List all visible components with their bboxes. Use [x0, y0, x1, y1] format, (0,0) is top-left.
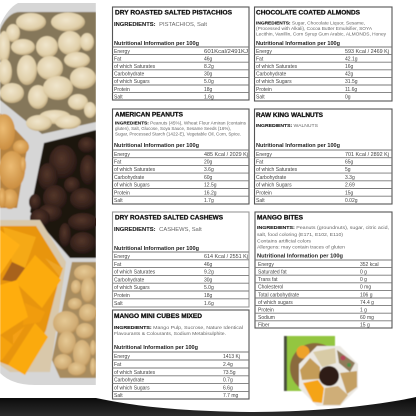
nutrition table: Carbohydrate — [114, 277, 145, 283]
nutrition table: Fiber — [258, 323, 270, 329]
nutrition table: 701 Kcal / 2892 Kj — [345, 152, 389, 158]
ingredients: INGREDIENTS: Peanuts (groundnuts), sugar, citric acid, — [257, 225, 389, 230]
nutrition table — [112, 252, 249, 307]
nutrition table: Energy — [114, 254, 130, 260]
nutrition table: Fat — [114, 262, 122, 268]
nutrition table: of which sugars — [258, 300, 293, 306]
chocolate almond compartment — [29, 130, 98, 258]
ingredients: Contains artificial colors — [257, 238, 312, 244]
nutrition table: of which Sugars — [114, 183, 150, 189]
nutrition table: Protein — [114, 87, 130, 93]
nutrition table: 46g — [204, 262, 213, 268]
ingredients: INGREDIENTS: PISTACHIOS, Salt — [114, 22, 207, 28]
nutrition table: 352 kcal — [360, 262, 379, 268]
nutrition table: 42g — [345, 72, 354, 78]
nutrition table — [254, 47, 392, 100]
nutrition table: Salt — [114, 393, 123, 399]
nutrition table: Salt — [114, 301, 123, 307]
nutrition table: 3.6g — [204, 167, 214, 173]
nutrition table: 42.1g — [345, 56, 358, 62]
nutrition heading: Nutritional Information per 100g — [114, 246, 200, 252]
nutrition table: 593 Kcal / 2469 Kj — [345, 49, 389, 55]
nutrition table: 1 g — [360, 308, 367, 314]
nutrition table: Salt — [114, 198, 123, 204]
nutrition table: 20g — [204, 160, 213, 166]
nutrition table: of which Sugars — [114, 385, 150, 391]
nutrition table: Fat — [114, 362, 122, 368]
ingredients — [257, 225, 389, 250]
nutrition table — [255, 260, 392, 329]
nutrition table: 18g — [204, 293, 213, 299]
nutrition table: Energy — [114, 49, 130, 55]
ingredients: Lecithin, Vanillin, Corn Syrup Gum Arabic, ALMONDS, Honey — [256, 32, 387, 36]
nutrition table: of which Saturates — [114, 370, 156, 376]
nutrition table: Energy — [256, 152, 272, 158]
nutrition table: 16g — [345, 64, 354, 70]
nutrition table: Energy — [114, 152, 130, 158]
ingredients: INGREDIENTS: WALNUTS — [256, 123, 318, 128]
ingredients: INGREDIENTS: CASHEWS, Salt — [114, 227, 202, 233]
nutrition table: 18g — [204, 87, 213, 93]
nutrition table: 46g — [204, 56, 213, 62]
panel: dry roasted salted cashews — [112, 212, 249, 307]
nutrition table: 1.6g — [204, 94, 214, 100]
product image: gift box and octagonal tray — [284, 336, 358, 406]
mango compartment — [0, 220, 66, 375]
photo: snack tray close-up — [0, 0, 98, 400]
heading: MANGO MINI CUBES MIXED — [114, 314, 203, 320]
nutrition table: 1.6g — [204, 301, 214, 307]
nutrition table — [112, 47, 249, 100]
heading: DRY ROASTED SALTED PISTACHIOS — [115, 10, 232, 16]
heading: CHOCOLATE COATED ALMONDS — [256, 10, 360, 16]
nutrition table: of which Sugars — [114, 285, 150, 291]
ingredients — [115, 120, 247, 136]
nutrition table: of which Sugars — [256, 79, 292, 85]
nutrition table: Carbohydrate — [256, 175, 287, 181]
ingredients: Allergens: may contain traces of gluten — [257, 244, 346, 250]
nutrition table: 3.3g — [345, 175, 355, 181]
nutrition table: Fat — [114, 56, 122, 62]
peanut compartment — [52, 262, 97, 378]
nutrition table: of which Sugars — [256, 183, 292, 189]
heading: DRY ROASTED SALTED CASHEWS — [115, 216, 223, 222]
nutrition table: 0 g — [360, 270, 367, 276]
nutrition table: Fat — [256, 56, 264, 62]
nutrition table: 60 mg — [360, 315, 374, 321]
nutrition table: Protein — [256, 87, 272, 93]
nutrition heading: Nutritional Information per 100g — [114, 143, 200, 149]
ingredients: Sugar, Processed Starch (1422-E), Vegetable Oil, Corn, Spice. — [115, 132, 241, 136]
nutrition heading: Nutritional Information per 100g — [114, 41, 200, 47]
nutrition table: 11.6g — [345, 87, 357, 93]
nutrition table: of which Saturates — [114, 167, 156, 173]
nutrition table: Fat — [256, 160, 264, 166]
nutrition heading: Nutritional Information per 100g — [257, 254, 344, 260]
nutrition table: 74.4 g — [360, 300, 374, 306]
nutrition table: 1.7g — [204, 198, 214, 204]
panel: raw king walnuts — [254, 109, 392, 204]
ingredients: INGREDIENTS: Sugar, Chocolate Liquor, Sesame, — [256, 20, 365, 26]
nutrition table: 5.0g — [204, 285, 214, 291]
panel: mango bites — [255, 212, 392, 329]
nutrition table: of which Saturates — [114, 64, 156, 70]
nutrition table — [112, 150, 249, 204]
nutrition heading: Nutritional Information per 100g — [256, 143, 341, 149]
nutrition table: 5g — [345, 167, 351, 173]
black curved footer band — [0, 397, 416, 416]
nutrition table — [112, 352, 249, 399]
nutrition table: 15 g — [360, 323, 370, 329]
ingredients: INGREDIENTS: Peanuts (45%), Wheat Flour Amiran (contains — [115, 120, 247, 126]
ingredients: salt, food coloring (E171, E102, E110) — [257, 232, 344, 237]
nutrition table: 2.4g — [223, 362, 233, 368]
nutrition table: of which Sugars — [114, 79, 150, 85]
cashew compartment — [0, 113, 29, 209]
nutrition table: Carbohydrate — [114, 378, 145, 384]
nutrition table: Protein — [256, 190, 272, 196]
nutrition table: Energy — [114, 354, 130, 360]
nutrition table: 106 g — [360, 292, 373, 298]
panel: chocolate coated almonds — [254, 7, 392, 101]
nutrition table: Cholesterol — [258, 285, 283, 291]
nutrition table: 0g — [345, 94, 351, 100]
ingredients: gluten), Salt, Glucose, Soya Sauce, Sesame Seeds (16%), — [115, 126, 231, 131]
nutrition heading: Nutritional Information per 100g — [114, 345, 199, 351]
green gift box — [284, 336, 340, 393]
nutrition table: Carbohydrate — [114, 72, 145, 78]
ingredients — [256, 20, 387, 36]
nutrition table: Carbohydrate — [256, 72, 287, 78]
nutrition table — [254, 150, 392, 204]
nutrition table: Trans fat — [258, 277, 278, 283]
nutrition table: 0 mg — [360, 285, 371, 291]
nutrition table: 2.69 — [345, 183, 355, 189]
nutrition table: 0 g — [360, 277, 367, 283]
nutrition table: 16.2g — [204, 190, 217, 196]
nutrition table: Salt — [256, 94, 265, 100]
nutrition heading: Nutritional Information per 100g — [256, 41, 341, 47]
pistachio compartment — [0, 12, 96, 134]
heading: RAW KING WALNUTS — [256, 113, 323, 119]
nutrition table: 1413 Kj — [223, 354, 240, 360]
nutrition table: of which Saturates — [256, 64, 298, 70]
nutrition table: of which Saturates — [256, 167, 298, 173]
nutrition table: Salt — [256, 198, 265, 204]
nutrition table: 0.7g — [223, 378, 233, 384]
nutrition table: Protein — [114, 190, 130, 196]
nutrition table: Energy — [258, 262, 274, 268]
nutrition table: 601Kcal/2491KJ — [204, 49, 249, 55]
nutrition table: 614 Kcal / 2551 Kj — [204, 254, 248, 260]
nutrition table: 65g — [345, 160, 354, 166]
nutrition table: 7.7 mg — [223, 393, 239, 399]
nutrition table: Protein — [114, 293, 130, 299]
heading: AMERICAN PEANUTS — [115, 112, 183, 118]
nutrition table: Carbohydrate — [114, 175, 145, 181]
nutrition table: Salt — [114, 94, 123, 100]
nutrition table: of which Saturates — [114, 270, 156, 276]
nutrition table: 30g — [204, 72, 213, 78]
ingredients — [114, 325, 243, 336]
ingredients: INGREDIENTS: Mango Pulp, Sucrose, Nature Identical — [114, 325, 243, 330]
ingredients: (Processed with Alkali), Cocoa Butter Emulsifier, SOYA — [256, 26, 372, 31]
ingredients: Flavourants & Colourants, Sodium Metabisulphite. — [114, 331, 226, 336]
nutrition table: 9.2g — [204, 270, 214, 276]
nutrition table: Sodium — [258, 315, 275, 321]
octagonal tray — [299, 346, 358, 406]
panel: mango mini cubes mixed — [112, 310, 249, 399]
nutrition table: 6.6g — [223, 385, 233, 391]
nutrition table: 30g — [204, 277, 213, 283]
panel: american peanuts — [112, 109, 249, 204]
nutrition table: 31.5g — [345, 79, 358, 85]
nutrition table: Saturated fat — [258, 270, 287, 276]
nutrition table: Protein — [258, 308, 274, 314]
nutrition table: 0.02g — [345, 198, 358, 204]
nutrition table: Fat — [114, 160, 122, 166]
nutrition table: 8.2g — [204, 64, 214, 70]
heading: MANGO BITES — [257, 216, 303, 222]
nutrition table: 73.5g — [223, 370, 236, 376]
nutrition table: 485 Kcal / 2029 Kj — [204, 152, 248, 158]
nutrition table: 15g — [345, 190, 354, 196]
nutrition table: Total carbohydrate — [258, 292, 299, 298]
nutrition table: 5.0g — [204, 79, 214, 85]
nutrition table: 12.5g — [204, 183, 217, 189]
nutrition table: Energy — [256, 49, 272, 55]
nutrition table: 60g — [204, 175, 213, 181]
panel: dry roasted salted pistachios — [112, 7, 249, 100]
